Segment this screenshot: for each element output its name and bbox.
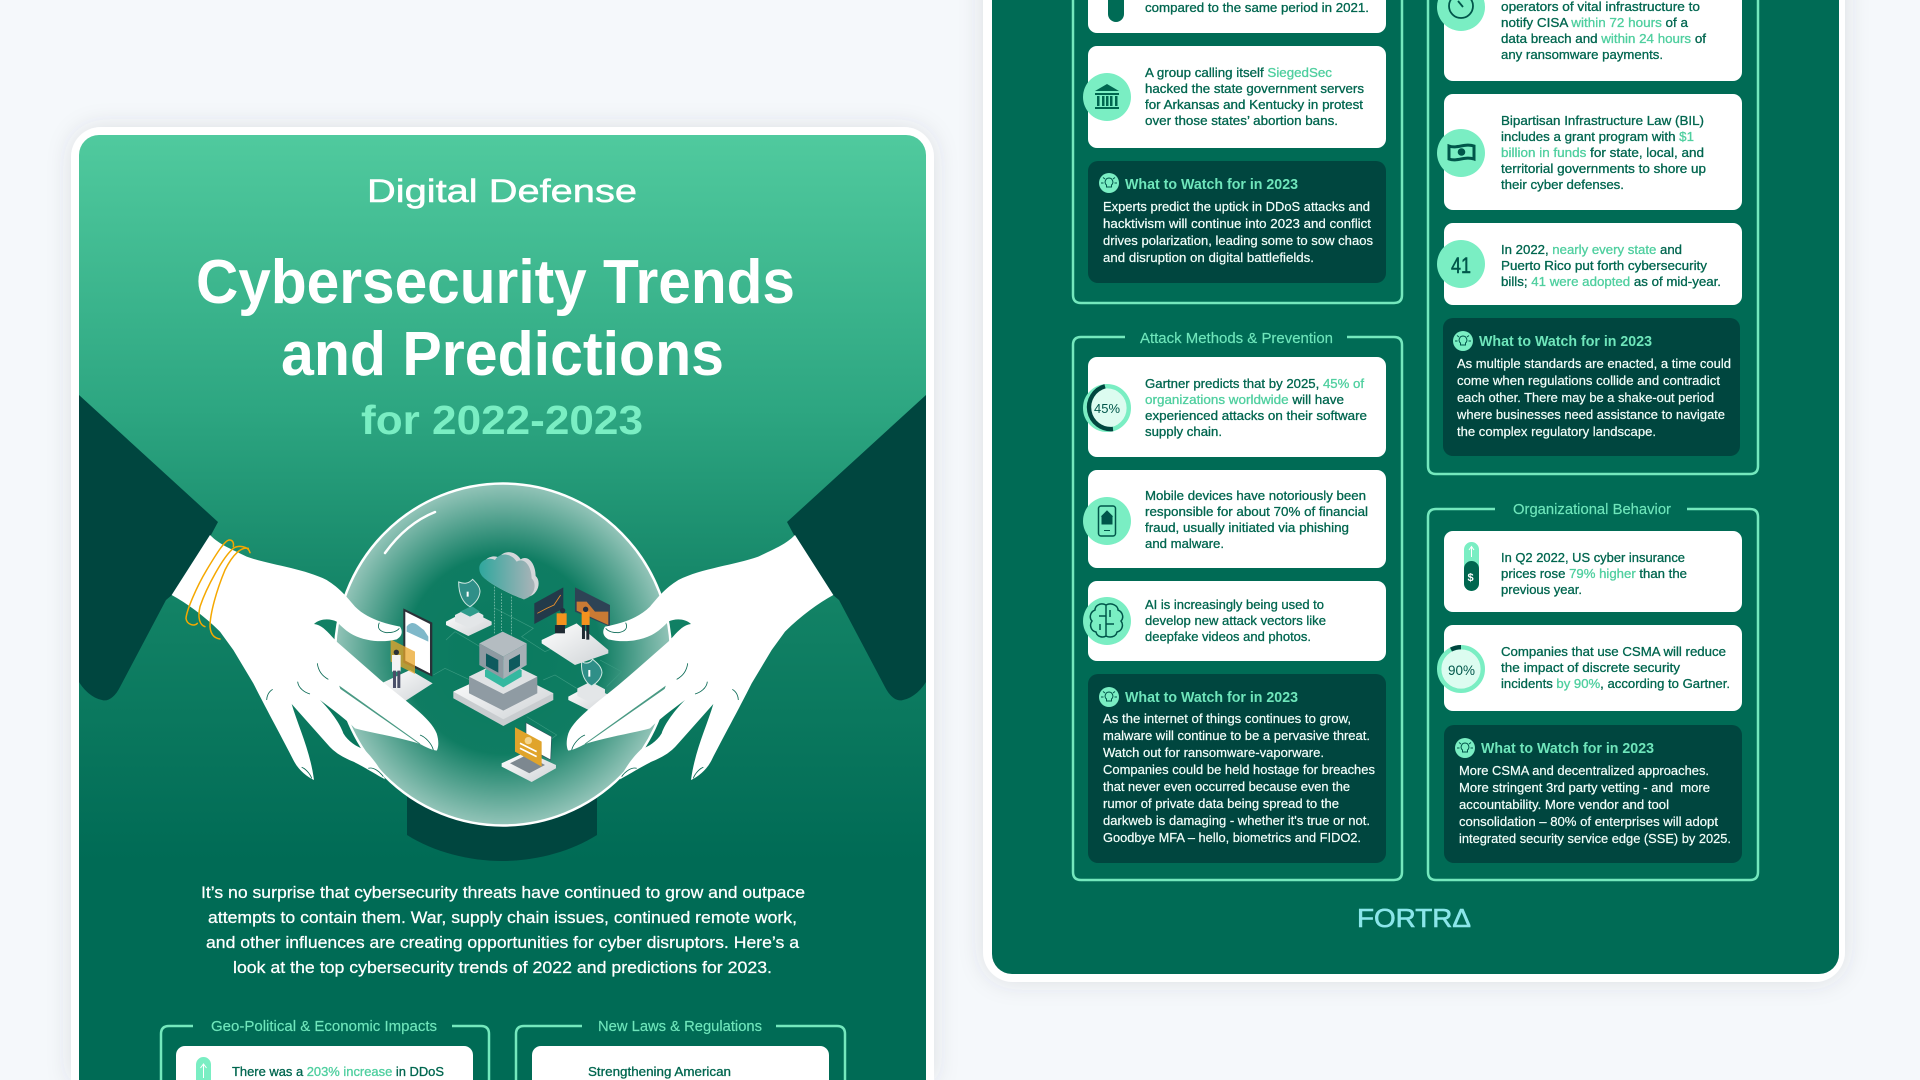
heading: New Laws & Regulations bbox=[598, 1019, 762, 1035]
card: CISA notification: any ransomware payments. bbox=[1501, 47, 1663, 62]
card: AI attack vectors bbox=[1083, 581, 1386, 661]
icon: lightbulb bbox=[1453, 331, 1473, 351]
chart: 45 percent ring: 45% bbox=[1094, 402, 1120, 416]
icon: mobile phone bbox=[1083, 497, 1131, 545]
callout: what to watch: that never even occurred because even the bbox=[1103, 779, 1350, 794]
dark green background bbox=[992, 0, 1839, 974]
intro paragraph: attempts to contain them. War, supply chain issues, continued remote work, bbox=[208, 908, 797, 927]
shield station left bbox=[446, 579, 492, 636]
hero gradient background bbox=[79, 135, 926, 1080]
crystal ball stand bbox=[407, 790, 597, 861]
callout: what to watch: come when regulations collide and contradict bbox=[1457, 373, 1720, 388]
callout: what to watch: More CSMA and decentralized approaches. bbox=[1459, 763, 1709, 778]
card frame bbox=[983, 0, 1845, 982]
icon: lightbulb bbox=[1099, 687, 1119, 707]
card: Bipartisan Infrastructure Law: Bipartisan Infrastructure Law (BIL) bbox=[1501, 113, 1704, 128]
icon: lightbulb bbox=[1455, 738, 1475, 758]
crystal ball bbox=[335, 484, 671, 826]
panel: infographic bottom section bbox=[983, 0, 1845, 982]
callout: what to watch: As the internet of things continues to grow, bbox=[1103, 711, 1351, 726]
callout: what to watch bbox=[1088, 161, 1386, 283]
card: CSMA: Companies that use CSMA will reduce bbox=[1501, 644, 1726, 659]
card: mobile fraud: and malware. bbox=[1145, 536, 1224, 551]
card: Bipartisan Infrastructure Law bbox=[1437, 94, 1742, 210]
callout: what to watch: What to Watch for in 2023 bbox=[1481, 741, 1654, 757]
callout: what to watch: integrated security service edge (SSE) by 2025. bbox=[1459, 831, 1731, 846]
intro paragraph bbox=[201, 883, 805, 977]
panel: infographic top section bbox=[71, 127, 934, 1080]
card: mobile fraud bbox=[1083, 470, 1386, 568]
tablet and user bbox=[380, 608, 433, 702]
card: CSMA bbox=[1439, 625, 1742, 711]
card: software supply chain: supply chain. bbox=[1145, 424, 1222, 439]
callout: what to watch: hacktivism will continue into 2023 and conflict bbox=[1103, 216, 1371, 231]
card: Bipartisan Infrastructure Law: their cyber defenses. bbox=[1501, 177, 1624, 192]
icon: banknote bbox=[1437, 129, 1485, 177]
shield station right bbox=[568, 659, 612, 711]
circuit connectors bbox=[433, 608, 622, 740]
card: AI attack vectors: deepfake videos and photos. bbox=[1145, 629, 1311, 644]
card: software supply chain: Gartner predicts that by 2025, 45% of bbox=[1145, 376, 1364, 391]
left hand bbox=[172, 535, 438, 780]
card: mobile fraud: Mobile devices have notoriously been bbox=[1145, 488, 1366, 503]
card: cyber insurance: previous year. bbox=[1501, 582, 1582, 597]
card: SiegedSec bbox=[1083, 46, 1386, 148]
card text: There was a 203% increase in DDoS bbox=[232, 1064, 444, 1079]
icon: ddos increase pill bbox=[196, 1057, 211, 1080]
card: CISA notification bbox=[1437, 0, 1742, 81]
icon: insurance price pill: $ bbox=[1468, 572, 1474, 584]
icon: clock bbox=[1437, 0, 1485, 31]
card: software supply chain: experienced attacks on their software bbox=[1145, 408, 1367, 423]
card: state bills bbox=[1437, 223, 1742, 305]
eyebrow heading: Digital Defense bbox=[367, 173, 637, 209]
callout: what to watch: Watch out for ransomware-vaporware. bbox=[1103, 745, 1324, 760]
callout: what to watch: What to Watch for in 2023 bbox=[1125, 690, 1298, 706]
card: SiegedSec: for Arkansas and Kentucky in protest bbox=[1145, 97, 1363, 112]
card: SiegedSec: hacked the state government servers bbox=[1145, 81, 1365, 96]
right hand bbox=[567, 535, 833, 780]
card: cyber insurance: prices rose 79% higher than the bbox=[1501, 566, 1687, 581]
intro paragraph: look at the top cybersecurity trends of 2022 and predictions for 2023. bbox=[233, 958, 772, 977]
heading: Attack Methods & Prevention bbox=[1140, 331, 1333, 347]
card: SiegedSec: A group calling itself SiegedSec bbox=[1145, 65, 1333, 80]
left hand creases bbox=[267, 623, 433, 778]
card: AI attack vectors: AI is increasingly being used to bbox=[1145, 597, 1324, 612]
callout: what to watch: malware will continue to be a pervasive threat. bbox=[1103, 728, 1370, 743]
heading: Organizational Behavior bbox=[1513, 502, 1671, 518]
card: state bills: Puerto Rico put forth cybersecurity bbox=[1501, 258, 1708, 273]
callout: what to watch: the complex regulatory landscape. bbox=[1457, 424, 1656, 439]
icon: insurance price pill bbox=[1464, 542, 1479, 591]
panel: new laws and regulations bbox=[516, 1019, 845, 1080]
card: SiegedSec: over those states’ abortion bans. bbox=[1145, 113, 1338, 128]
callout: what to watch: What to Watch for in 2023 bbox=[1125, 177, 1298, 193]
intro paragraph: It’s no surprise that cybersecurity threats have continued to grow and outpace bbox=[201, 883, 805, 902]
left sleeve bbox=[79, 395, 218, 700]
subtitle: for 2022-2023 bbox=[361, 397, 643, 443]
dashed cloud links bbox=[494, 587, 511, 640]
callout: what to watch: rumor of private data being spread to the bbox=[1103, 796, 1339, 811]
card: CISA notification: data breach and within 24 hours of bbox=[1501, 31, 1706, 46]
chart: 90 percent ring: 90% bbox=[1448, 662, 1475, 678]
panel: attack methods and prevention bbox=[1073, 331, 1402, 880]
callout: what to watch: Companies could be held hostage for breaches bbox=[1103, 762, 1375, 777]
panel: geo-political continued bbox=[1073, 0, 1402, 303]
panel: new laws continued bbox=[1428, 0, 1758, 474]
card: mobile fraud: fraud, usually initiated via phishing bbox=[1145, 520, 1349, 535]
callout: what to watch: Experts predict the uptick in DDoS attacks and bbox=[1103, 199, 1370, 214]
card: cyber insurance bbox=[1444, 531, 1742, 612]
bracelet bbox=[186, 540, 250, 639]
central server bbox=[453, 632, 553, 726]
card: mobile fraud: responsible for about 70% of financial bbox=[1145, 504, 1368, 519]
callout: what to watch: What to Watch for in 2023 bbox=[1479, 334, 1652, 350]
laptop bbox=[502, 723, 556, 782]
card: ddos comparison bbox=[1088, 0, 1386, 33]
icon: lightbulb bbox=[1099, 173, 1119, 193]
callout: what to watch: and disruption on digital battlefields. bbox=[1103, 250, 1314, 265]
card text: Strengthening American bbox=[588, 1064, 731, 1079]
card: Bipartisan Infrastructure Law: territorial governments to shore up bbox=[1501, 161, 1706, 176]
callout: what to watch: each other. There may be a shake-out period bbox=[1457, 390, 1714, 405]
card: Bipartisan Infrastructure Law: billion in funds for state, local, and bbox=[1501, 145, 1704, 160]
title bbox=[196, 248, 795, 389]
callout: what to watch: More stringent 3rd party vetting - and more bbox=[1459, 780, 1710, 795]
isometric network illustration bbox=[380, 552, 622, 782]
chart: 45 percent ring bbox=[1085, 386, 1129, 430]
callout: what to watch bbox=[1444, 725, 1742, 863]
card: state bills: In 2022, nearly every state and bbox=[1501, 242, 1682, 257]
icon: brain bbox=[1083, 597, 1131, 645]
card: state bills: bills; 41 were adopted as of mid-year. bbox=[1501, 274, 1721, 289]
card bbox=[176, 1046, 473, 1080]
card: ddos comparison: compared to the same period in 2021. bbox=[1145, 0, 1369, 15]
title: Cybersecurity Trends bbox=[196, 248, 795, 317]
card bbox=[532, 1046, 829, 1080]
right sleeve bbox=[787, 395, 926, 700]
callout: what to watch: consolidation – 80% of enterprises will adopt bbox=[1459, 814, 1718, 829]
card: software supply chain bbox=[1085, 357, 1386, 457]
callout: what to watch: where businesses need assistance to navigate bbox=[1456, 407, 1725, 422]
logo: Fortra: FORTRΔ bbox=[1357, 903, 1471, 933]
callout: what to watch: As multiple standards are enacted, a time could bbox=[1457, 356, 1731, 371]
card: Bipartisan Infrastructure Law: includes a grant program with $1 bbox=[1501, 129, 1694, 144]
panel: organizational behavior bbox=[1428, 502, 1758, 880]
card: CISA notification: notify CISA within 72 hours of a bbox=[1501, 15, 1689, 30]
callout: what to watch bbox=[1088, 674, 1386, 863]
heading: Geo-Political & Economic Impacts bbox=[211, 1019, 437, 1035]
chart: 90 percent ring bbox=[1439, 647, 1483, 691]
card: cyber insurance: In Q2 2022, US cyber insurance bbox=[1501, 550, 1685, 565]
card: CSMA: incidents by 90%, according to Gartner. bbox=[1501, 676, 1730, 691]
callout: what to watch bbox=[1443, 318, 1740, 456]
panel: geo-political and economic impacts bbox=[161, 1019, 489, 1080]
card: AI attack vectors: develop new attack vectors like bbox=[1145, 613, 1326, 628]
cloud bbox=[479, 552, 539, 599]
intro paragraph: and other influences are creating opportunities for cyber disruptors. Here’s a bbox=[206, 933, 800, 952]
callout: what to watch: accountability. More vendor and tool bbox=[1459, 797, 1669, 812]
title: and Predictions bbox=[281, 320, 724, 389]
callout: what to watch: darkweb is damaging - whether it's true or not. bbox=[1103, 813, 1370, 828]
card frame bbox=[71, 127, 934, 1080]
card: CSMA: the impact of discrete security bbox=[1501, 660, 1681, 675]
icon: 41 badge bbox=[1437, 240, 1485, 288]
callout: what to watch: Goodbye MFA – hello, biometrics and FIDO2. bbox=[1103, 830, 1361, 845]
card: software supply chain: organizations worldwide will have bbox=[1145, 392, 1344, 407]
callout: what to watch: drives polarization, leading some to sow chaos bbox=[1103, 233, 1374, 248]
icon: government building bbox=[1083, 73, 1131, 121]
analysts at screens bbox=[534, 587, 610, 665]
icon: 41 badge: 41 bbox=[1451, 253, 1471, 278]
